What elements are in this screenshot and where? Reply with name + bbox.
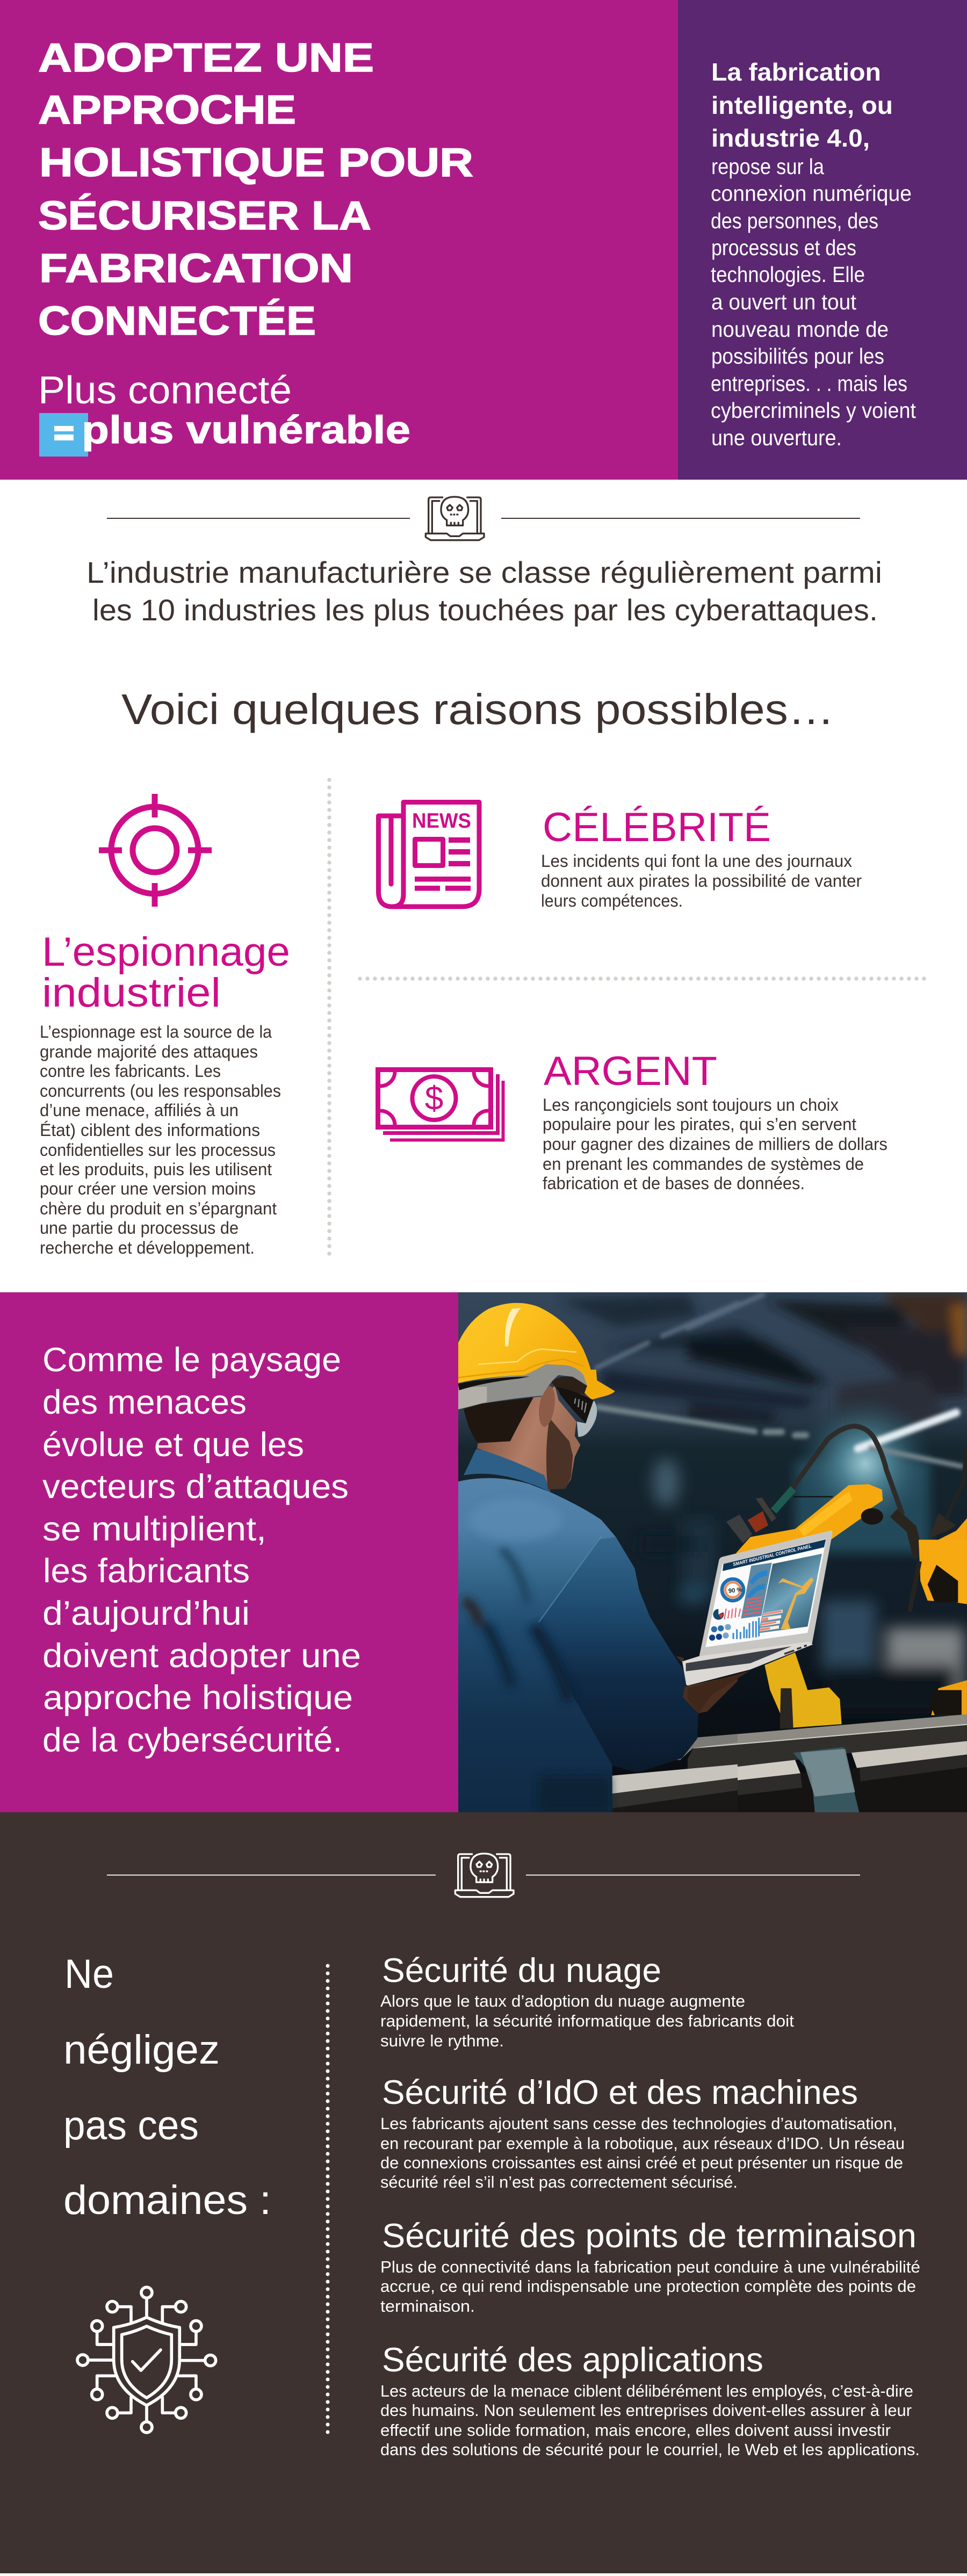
body: money: pour gagner des dizaines de milliers de dollars — [543, 1134, 887, 1154]
statement text: d’aujourd’hui — [42, 1595, 250, 1632]
panel: holistic approach statement — [0, 1292, 458, 1812]
intro body text: nouveau monde de — [711, 317, 889, 342]
body: espionage: chère du produit en s’épargnant — [40, 1199, 277, 1218]
body: espionage: État) ciblent des informations — [40, 1120, 260, 1140]
intro body text: des personnes, des — [711, 208, 878, 233]
body: celebrity: leurs compétences. — [541, 891, 683, 910]
body: money: populaire pour les pirates, qui s’en servent — [543, 1115, 856, 1134]
heading: do not neglect — [63, 1951, 271, 2223]
intro body text: technologies. Elle — [711, 262, 865, 287]
body: espionage: une partie du processus de — [40, 1218, 239, 1238]
body: money: en prenant les commandes de systèmes de — [543, 1154, 864, 1174]
body: money: fabrication et de bases de données. — [543, 1174, 805, 1193]
intro bold text: intelligente, ou — [711, 91, 893, 119]
section: IoT and machine security: sécurité réel s’il n’est pas correctement sécurisé. — [380, 2173, 738, 2191]
panel: areas not to neglect — [0, 1812, 967, 2573]
rail segment behind worker — [676, 1734, 738, 1760]
section: endpoint security: Sécurité des points de terminaison — [382, 2217, 917, 2255]
heading: reasons: Voici quelques raisons possibles… — [121, 685, 834, 733]
icon: newspaper: NEWS — [412, 809, 471, 833]
panel: header title — [0, 0, 678, 480]
statement text: vecteurs d’attaques — [42, 1468, 349, 1506]
icon: newspaper — [378, 802, 479, 907]
heading: main title — [38, 35, 473, 343]
body: celebrity: Les incidents qui font la une des journaux — [541, 851, 852, 871]
body: espionage: d’une menace, affiliés à un — [40, 1101, 239, 1120]
worker — [458, 1303, 738, 1814]
panel: celebrity — [378, 802, 862, 910]
body: money: Les rançongiciels sont toujours un choix — [543, 1095, 839, 1115]
section: application security — [380, 2341, 920, 2459]
statement text: évolue et que les — [42, 1426, 304, 1464]
body: espionage: recherche et développement. — [40, 1238, 255, 1257]
section: cloud security: rapidement, la sécurité informatique des fabricants doit — [380, 2011, 794, 2030]
icon: target — [99, 794, 212, 907]
section: endpoint security — [380, 2217, 920, 2315]
section: application security: des humains. Non seulement les entreprises doivent-elles assurer à leur — [380, 2401, 912, 2420]
heading: main title: CONNECTÉE — [38, 298, 316, 343]
icon: skull laptop — [425, 497, 484, 540]
conveyor rails — [688, 1714, 967, 1815]
section: application security: Sécurité des applications — [382, 2341, 763, 2379]
section: IoT and machine security: en recourant par exemple à la robotique, aux réseaux d’IDO. Un réseau — [380, 2134, 905, 2153]
section: endpoint security: Plus de connectivité dans la fabrication peut conduire à une vulnérabilité — [380, 2257, 920, 2276]
section: IoT and machine security: de connexions croissantes est ainsi créé et peut présenter un risque de — [380, 2153, 903, 2172]
body: espionage: et les produits, puis les utilisent — [40, 1160, 272, 1179]
intro bold text — [711, 58, 893, 152]
icon: banknotes: $ — [425, 1080, 443, 1117]
icon: skull laptop — [455, 1854, 514, 1897]
icon: circuit shield with check — [77, 2287, 216, 2433]
heading: main title: FABRICATION — [39, 245, 353, 291]
icon: banknotes — [378, 1070, 503, 1140]
heading: do not neglect: pas ces — [63, 2103, 199, 2148]
statement text: des menaces — [42, 1384, 247, 1421]
statement text: Comme le paysage — [42, 1341, 341, 1379]
section: cloud security: suivre le rythme. — [380, 2031, 504, 2050]
heading: espionage: industriel — [42, 970, 221, 1016]
heading: celebrity: CÉLÉBRITÉ — [543, 805, 771, 850]
intro statement — [86, 555, 882, 627]
robot arms — [726, 1426, 967, 1568]
intro body text: processus et des — [711, 235, 856, 260]
image: engineer with laptop and factory robots — [458, 1292, 967, 1815]
statement text — [42, 1341, 361, 1759]
divider with skull laptop icon — [107, 497, 860, 540]
safety glasses — [577, 1401, 597, 1437]
statement text: de la cybersécurité. — [42, 1721, 342, 1759]
blurred ceiling and factory background — [559, 1292, 967, 1552]
helmet harness — [458, 1364, 587, 1409]
intro body text: entreprises. . . mais les — [711, 371, 907, 396]
heading: money: ARGENT — [544, 1048, 717, 1094]
section: cloud security: Sécurité du nuage — [382, 1952, 661, 1989]
heading: main title: APPROCHE — [38, 87, 296, 132]
section: cloud security — [380, 1952, 794, 2050]
statement text: les fabricants — [43, 1552, 250, 1590]
heading: do not neglect: négligez — [63, 2027, 220, 2073]
body: celebrity — [541, 851, 862, 910]
intro body text: connexion numérique — [711, 181, 912, 206]
section: IoT and machine security — [380, 2074, 905, 2191]
body: espionage: concurrents (ou les responsables — [40, 1081, 281, 1101]
body: espionage: confidentielles sur les processus — [40, 1140, 276, 1160]
section: endpoint security: terminaison. — [380, 2297, 475, 2315]
panel: money — [378, 1048, 887, 1193]
icon: equals sign on blue square — [39, 413, 88, 457]
statement text: approche holistique — [43, 1679, 353, 1717]
section: application security: Les acteurs de la menace ciblent délibérément les employés, c’est-à-dire — [380, 2382, 913, 2400]
heading: espionage — [42, 929, 290, 1016]
body: money — [543, 1095, 887, 1193]
intro statement: les 10 industries les plus touchées par les cyberattaques. — [92, 593, 878, 627]
section: cloud security: Alors que le taux d’adoption du nuage augmente — [380, 1992, 745, 2010]
heading: espionage: L’espionnage — [42, 929, 290, 975]
divider with skull laptop icon — [107, 1854, 860, 1897]
intro body text: possibilités pour les — [711, 344, 884, 368]
heading: do not neglect: domaines : — [63, 2177, 271, 2223]
statement text: se multiplient, — [42, 1510, 266, 1548]
hand on right of laptop — [688, 1670, 750, 1713]
shirt — [458, 1478, 698, 1814]
subtitle: plus vulnérable: plus vulnérable — [82, 409, 410, 452]
heading: main title: SÉCURISER LA — [38, 193, 371, 238]
laptop with control panel: 90 % — [728, 1587, 742, 1595]
intro bold text: La fabrication — [711, 58, 881, 86]
body: espionage — [40, 1022, 281, 1257]
neck and face — [477, 1386, 580, 1489]
section: endpoint security: accrue, ce qui rend indispensable une protection complète des points de — [380, 2277, 916, 2296]
body: celebrity: donnent aux pirates la possibilité de vanter — [541, 871, 862, 891]
laptop with control panel: SMART INDUSTRIAL CONTROL PANEL — [732, 1543, 812, 1567]
subtitle: plus connecté: Plus connecté — [38, 369, 292, 412]
intro bold text: industrie 4.0, — [711, 124, 870, 152]
panel: smart manufacturing intro — [678, 0, 967, 480]
intro body text: une ouverture. — [711, 425, 842, 450]
section: application security: effectif une solide formation, mais encore, elles doivent aussi investir — [380, 2421, 891, 2440]
laptop with control panel — [682, 1530, 833, 1685]
heading: do not neglect: Ne — [64, 1951, 114, 1997]
section: IoT and machine security: Sécurité d’IdO et des machines — [382, 2074, 858, 2111]
intro body text — [711, 154, 917, 450]
intro body text: a ouvert un tout — [711, 290, 857, 314]
hand under laptop — [676, 1656, 738, 1713]
statement text: doivent adopter une — [42, 1637, 361, 1675]
section: application security: dans des solutions de sécurité pour le courriel, le Web et les applications. — [380, 2440, 920, 2459]
heading: main title: HOLISTIQUE POUR — [39, 140, 473, 185]
body: espionage: pour créer une version moins — [40, 1179, 256, 1198]
panel: industrial espionage — [40, 794, 290, 1257]
intro body text: cybercriminels y voient — [711, 398, 917, 423]
body: espionage: grande majorité des attaques — [40, 1042, 258, 1061]
blurred background machinery — [639, 1458, 964, 1713]
body: espionage: L’espionnage est la source de la — [40, 1022, 272, 1041]
heading: main title: ADOPTEZ UNE — [38, 35, 374, 80]
intro statement: L’industrie manufacturière se classe régulièrement parmi — [86, 555, 882, 589]
collar — [464, 1449, 551, 1492]
body: espionage: contre les fabricants. Les — [40, 1061, 221, 1081]
intro body text: repose sur la — [711, 154, 824, 179]
hard hat — [458, 1303, 615, 1400]
section: IoT and machine security: Les fabricants ajoutent sans cesse des technologies d’automatisation, — [380, 2114, 897, 2133]
